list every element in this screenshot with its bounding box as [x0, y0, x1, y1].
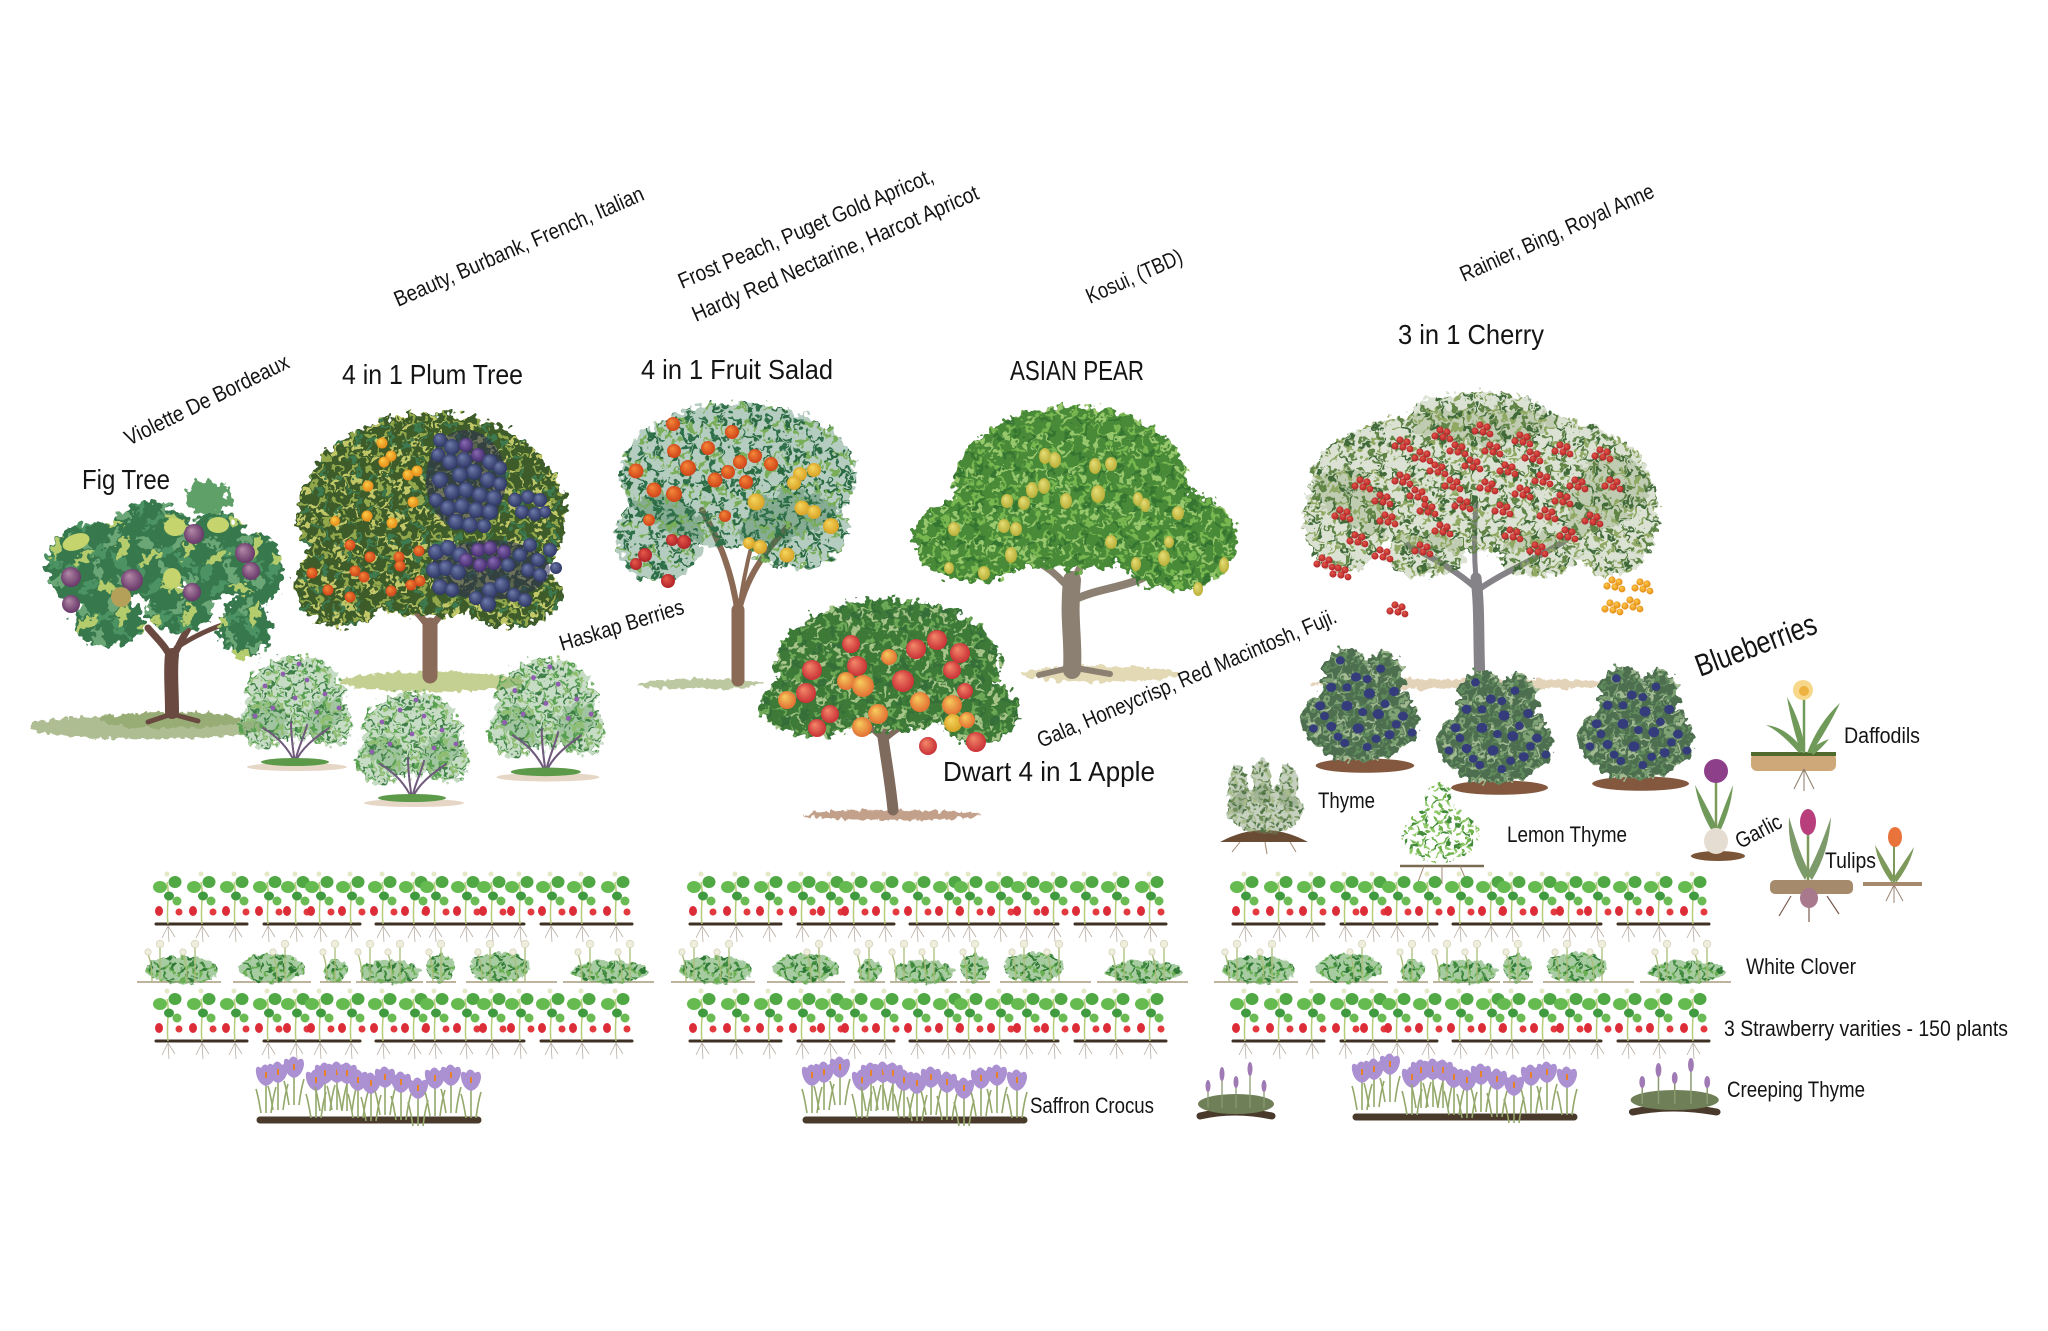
- strawberry row top, centre: [687, 872, 1166, 942]
- apple ground: [804, 810, 980, 820]
- cherries: [1313, 421, 1623, 617]
- tree: 3 in 1 cherry: [1303, 392, 1658, 689]
- white clover row, right: [1214, 940, 1731, 984]
- white clover row, centre: [671, 940, 1188, 984]
- red apricot fruit: [306, 540, 426, 602]
- dark plum shade: [426, 430, 550, 600]
- strawberry row bottom, centre: [687, 988, 1166, 1059]
- label: Daffodils: Daffodils: [1844, 723, 1920, 748]
- fruit salad trunk: [702, 510, 789, 680]
- label: Kosui, (TBD): Kosui, (TBD): [1082, 244, 1186, 309]
- orange fruit: [330, 438, 422, 528]
- label: Lemon Thyme: Lemon Thyme: [1507, 822, 1627, 847]
- label: Thyme: Thyme: [1318, 788, 1375, 813]
- blueberry bushes: [1302, 648, 1693, 795]
- heading: Dwart 4 in 1 Apple: Dwart 4 in 1 Apple: [943, 756, 1155, 787]
- yellow fruit: [743, 463, 839, 562]
- haskap bush 1: [239, 656, 353, 771]
- heading: 3 in 1 Cherry: 3 in 1 Cherry: [1398, 319, 1544, 350]
- label: Haskap Berries: Haskap Berries: [556, 594, 687, 656]
- haskap bush 3: [488, 658, 606, 781]
- fig trunk: [148, 618, 244, 722]
- plant: lemon thyme: [1400, 783, 1484, 884]
- label: 3 Strawberry varities - 150 plants: 3 Strawberry varities - 150 plants: [1724, 1016, 2008, 1041]
- saffron crocus right: [1352, 1054, 1577, 1123]
- strawberry row bottom, right: [1230, 988, 1709, 1059]
- tree: 4 in 1 plum: [294, 413, 566, 692]
- apples: [778, 630, 986, 755]
- blueberry bush 3: [1579, 666, 1693, 791]
- tree: dwarf 4 in 1 apple: [761, 599, 1018, 820]
- label: White Clover: White Clover: [1746, 954, 1856, 979]
- tree: fig: [30, 480, 283, 739]
- label: Garlic: Garlic: [1731, 809, 1786, 853]
- heading: 4 in 1 Plum Tree: 4 in 1 Plum Tree: [342, 359, 523, 390]
- figs: [61, 524, 260, 613]
- label: Rainier, Bing, Royal Anne: Rainier, Bing, Royal Anne: [1456, 178, 1658, 287]
- label: Frost Peach, Puget Gold Apricot: Frost Peach, Puget Gold Apricot,: [674, 163, 937, 294]
- heading: Fig Tree: Fig Tree: [82, 464, 170, 495]
- orange cherries: [1601, 576, 1653, 615]
- label: Hardy Red Nectarine, Harcot Apricot: Hardy Red Nectarine, Harcot Apricot: [688, 180, 982, 327]
- red-orange fruit: [628, 417, 778, 526]
- cherry canopy: [1303, 392, 1658, 577]
- strawberry row bottom, left: [153, 988, 632, 1059]
- blueberry bush 1: [1302, 648, 1419, 773]
- plant: daffodil: [1751, 680, 1840, 791]
- apple trunk: [845, 710, 950, 810]
- label: Tulips: Tulips: [1825, 848, 1876, 873]
- haskap berry bushes: [239, 656, 606, 807]
- plant: tulip large: [1770, 809, 1853, 922]
- pear canopy: [913, 406, 1237, 590]
- label: Saffron Crocus: Saffron Crocus: [1030, 1093, 1154, 1118]
- tree: asian pear: [913, 406, 1237, 682]
- creeping thyme left: [1198, 1062, 1274, 1116]
- cherry trunk: [1408, 505, 1566, 680]
- saffron crocus left: [256, 1056, 481, 1126]
- cherry ground: [1309, 679, 1639, 689]
- saffron crocus centre: [802, 1056, 1027, 1126]
- blue plums: [426, 433, 562, 612]
- plant: tulip small: [1863, 827, 1922, 903]
- apple canopy: [761, 599, 1018, 744]
- strawberry row top, left: [153, 872, 632, 942]
- label: Creeping Thyme: Creeping Thyme: [1727, 1077, 1865, 1102]
- white clover row, left: [137, 940, 654, 984]
- plum ground: [340, 672, 524, 692]
- red fruit: [630, 534, 691, 588]
- plant: garlic: [1691, 759, 1745, 861]
- label: Violette De Bordeaux: Violette De Bordeaux: [120, 349, 293, 450]
- blueberry bush 2: [1438, 670, 1552, 795]
- pears: [944, 448, 1229, 596]
- fig canopy: [46, 480, 283, 658]
- fig ground: [30, 712, 266, 739]
- haskap bush 2: [356, 692, 470, 807]
- plant: thyme: [1220, 758, 1308, 854]
- plum trunk: [398, 598, 462, 676]
- fruit salad ground: [638, 679, 762, 689]
- plum canopy: [294, 413, 566, 627]
- strawberry row top, right: [1230, 872, 1709, 942]
- pear ground: [1021, 666, 1177, 682]
- tree: 4 in 1 fruit salad: [616, 403, 856, 689]
- heading: ASIAN PEAR: ASIAN PEAR: [1010, 355, 1144, 386]
- label: Gala, Honeycrisp, Red Macintosh, Fuji.: Gala, Honeycrisp, Red Macintosh, Fuji.: [1033, 603, 1340, 753]
- pear trunk: [1014, 535, 1169, 675]
- heading: Blueberries: Blueberries: [1690, 606, 1821, 684]
- creeping thyme right: [1631, 1058, 1719, 1112]
- fruit salad canopy: [616, 403, 856, 582]
- heading: 4 in 1 Fruit Salad: 4 in 1 Fruit Salad: [641, 354, 833, 385]
- fig yellow leaves: [60, 517, 229, 588]
- label: Beauty, Burbank, French, Italian: Beauty, Burbank, French, Italian: [390, 181, 648, 312]
